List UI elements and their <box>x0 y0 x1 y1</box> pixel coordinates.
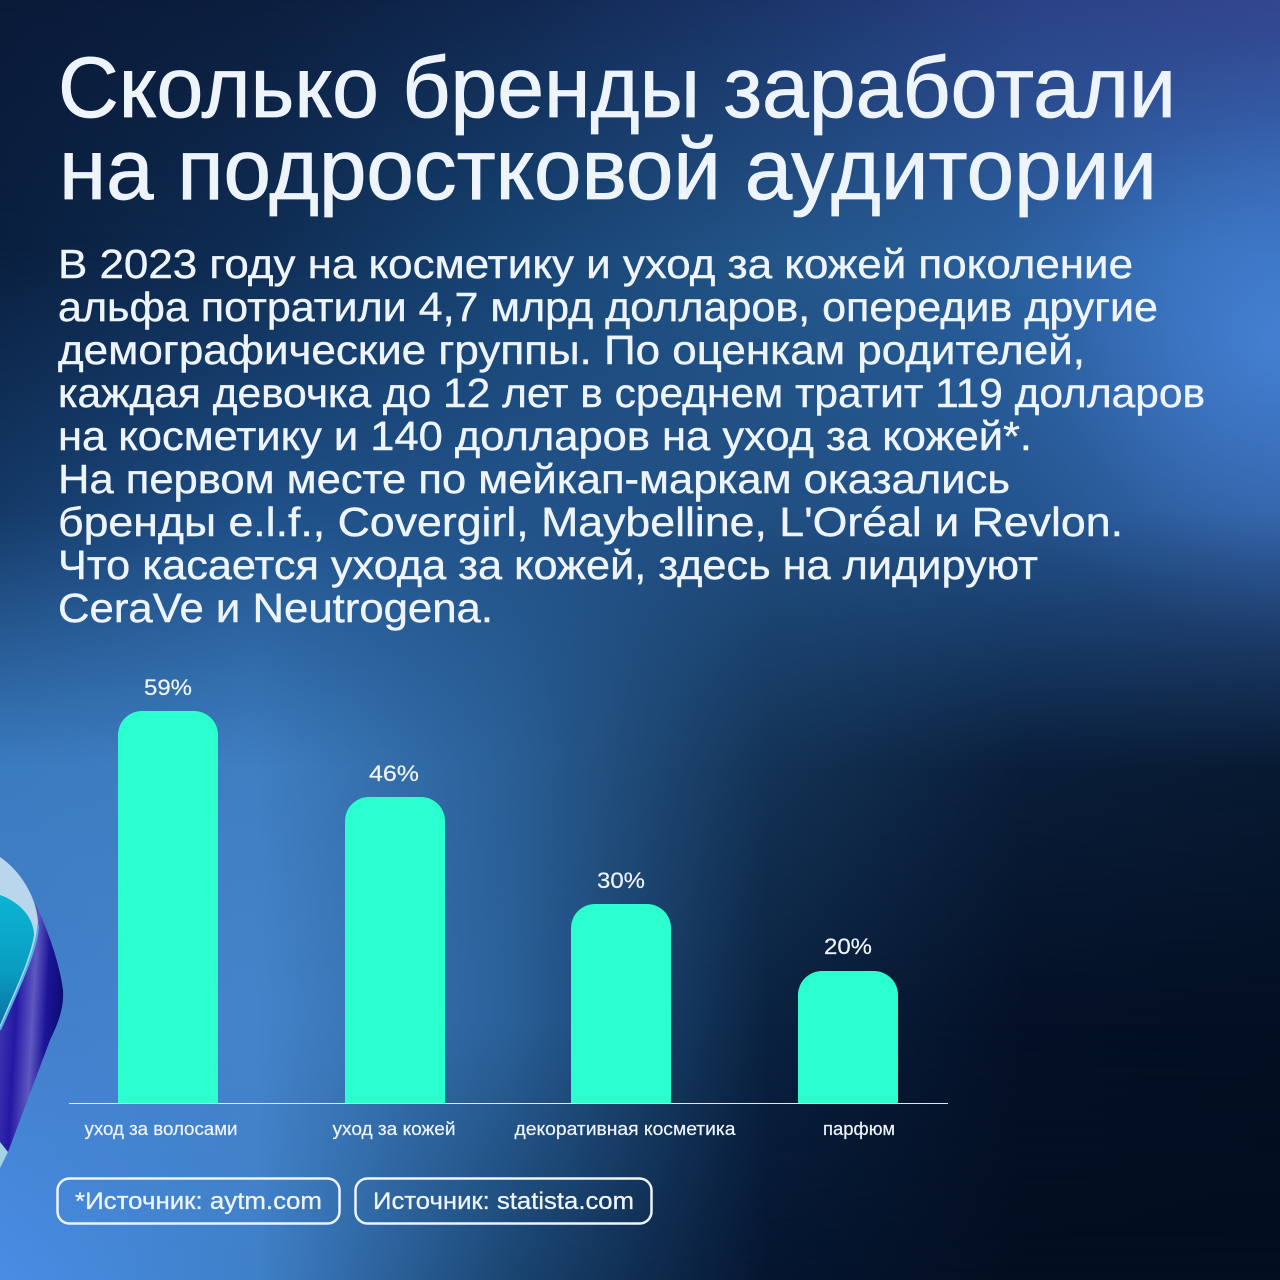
title: на подростковой аудитории <box>59 122 1157 218</box>
body text: CeraVe и Neutrogena. <box>58 585 493 631</box>
title <box>58 40 1176 218</box>
bar: уход за волосами 59% <box>84 675 238 1139</box>
bar: уход за кожей 46%: 46% <box>369 761 419 786</box>
bar: уход за кожей 46% <box>332 761 456 1139</box>
bar: декоративная косметика 30%: декоративная косметика <box>514 1118 736 1139</box>
body text: бренды e.l.f., Covergirl, Maybelline, L'Oréal и Revlon. <box>58 499 1123 545</box>
bar: уход за волосами 59%: 59% <box>144 675 192 700</box>
bar: уход за кожей 46%: уход за кожей <box>332 1118 456 1139</box>
body text: на косметику и 140 долларов на уход за кожей*. <box>58 413 1032 459</box>
bar chart <box>69 675 948 1139</box>
body text: демографические группы. По оценкам родителей, <box>58 327 1085 373</box>
source badge: aytm: *Источник: aytm.com <box>75 1188 322 1215</box>
source badge: statista: Источник: statista.com <box>373 1188 634 1215</box>
body text: В 2023 году на косметику и уход за кожей поколение <box>58 241 1133 287</box>
body text: каждая девочка до 12 лет в среднем тратит 119 долларов <box>58 370 1205 416</box>
icon: glossy 3D shape at left edge <box>0 857 63 1168</box>
bar: парфюм 20% <box>798 934 898 1139</box>
bar: парфюм 20%: парфюм <box>823 1118 895 1139</box>
body text: Что касается ухода за кожей, здесь на лидируют <box>58 542 1038 588</box>
body text <box>58 241 1205 631</box>
bar: уход за волосами 59%: уход за волосами <box>84 1118 238 1139</box>
bar: декоративная косметика 30% <box>514 868 736 1139</box>
bar: парфюм 20%: 20% <box>824 934 872 959</box>
body text: альфа потратили 4,7 млрд долларов, опередив другие <box>58 284 1158 330</box>
source badge: aytm <box>58 1178 340 1224</box>
body text: На первом месте по мейкап-маркам оказались <box>58 456 1010 502</box>
source badge: statista <box>356 1178 652 1224</box>
title: Сколько бренды заработали <box>58 40 1176 136</box>
bar: декоративная косметика 30%: 30% <box>597 868 645 893</box>
